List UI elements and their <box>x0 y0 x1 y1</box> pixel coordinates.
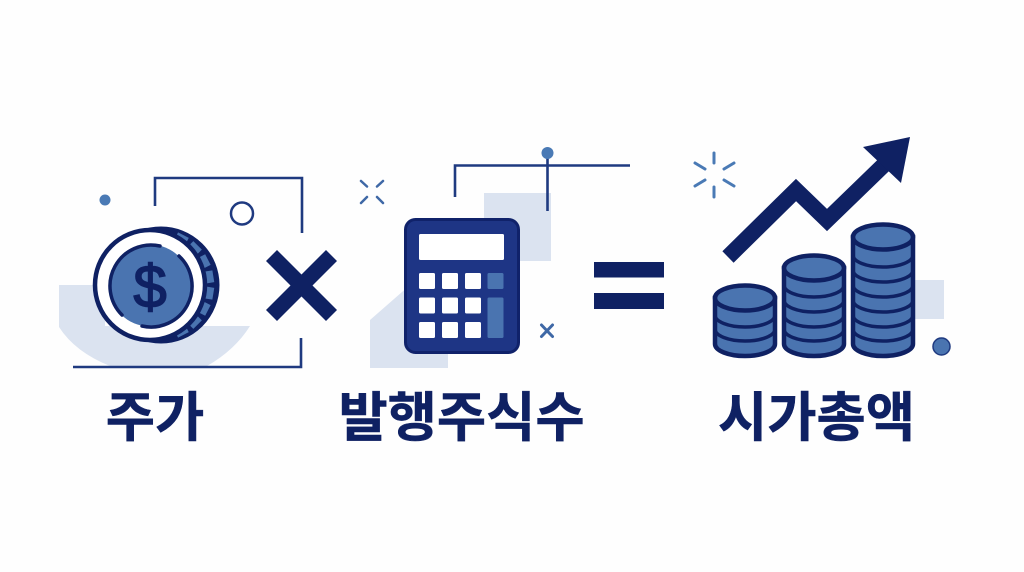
label: share price: 주가 <box>106 389 204 448</box>
icon: middle coin stack <box>784 256 844 356</box>
bracket frame bottom <box>73 338 301 367</box>
decorative sparkle <box>695 153 734 197</box>
bracket line <box>455 153 630 211</box>
light background shape lower <box>370 285 448 368</box>
light background shape behind coin <box>59 285 250 366</box>
icon: dollar coin <box>95 229 217 341</box>
decorative node <box>542 147 554 159</box>
light background square <box>912 280 944 319</box>
decorative small cross <box>542 325 552 336</box>
light background shape upper <box>484 193 551 261</box>
label: market cap: 시가총액 <box>718 389 915 448</box>
operator: multiply <box>266 250 337 321</box>
decorative ring <box>231 202 253 224</box>
icon: dollar coin: $ <box>133 253 167 320</box>
bracket frame top <box>155 178 302 233</box>
panel: share price <box>59 178 302 448</box>
decorative dot <box>933 338 950 355</box>
icon: left coin stack <box>715 286 775 356</box>
panel: market cap <box>695 137 950 448</box>
panel: shares outstanding <box>338 147 630 448</box>
decorative dot <box>100 194 110 206</box>
icon: calculator <box>406 220 518 352</box>
icon: rising arrow <box>728 137 910 257</box>
operator: equals <box>594 262 664 309</box>
icon: right coin stack <box>853 224 913 356</box>
label: shares outstanding: 발행주식수 <box>338 389 585 448</box>
decorative sparkle <box>361 181 383 203</box>
